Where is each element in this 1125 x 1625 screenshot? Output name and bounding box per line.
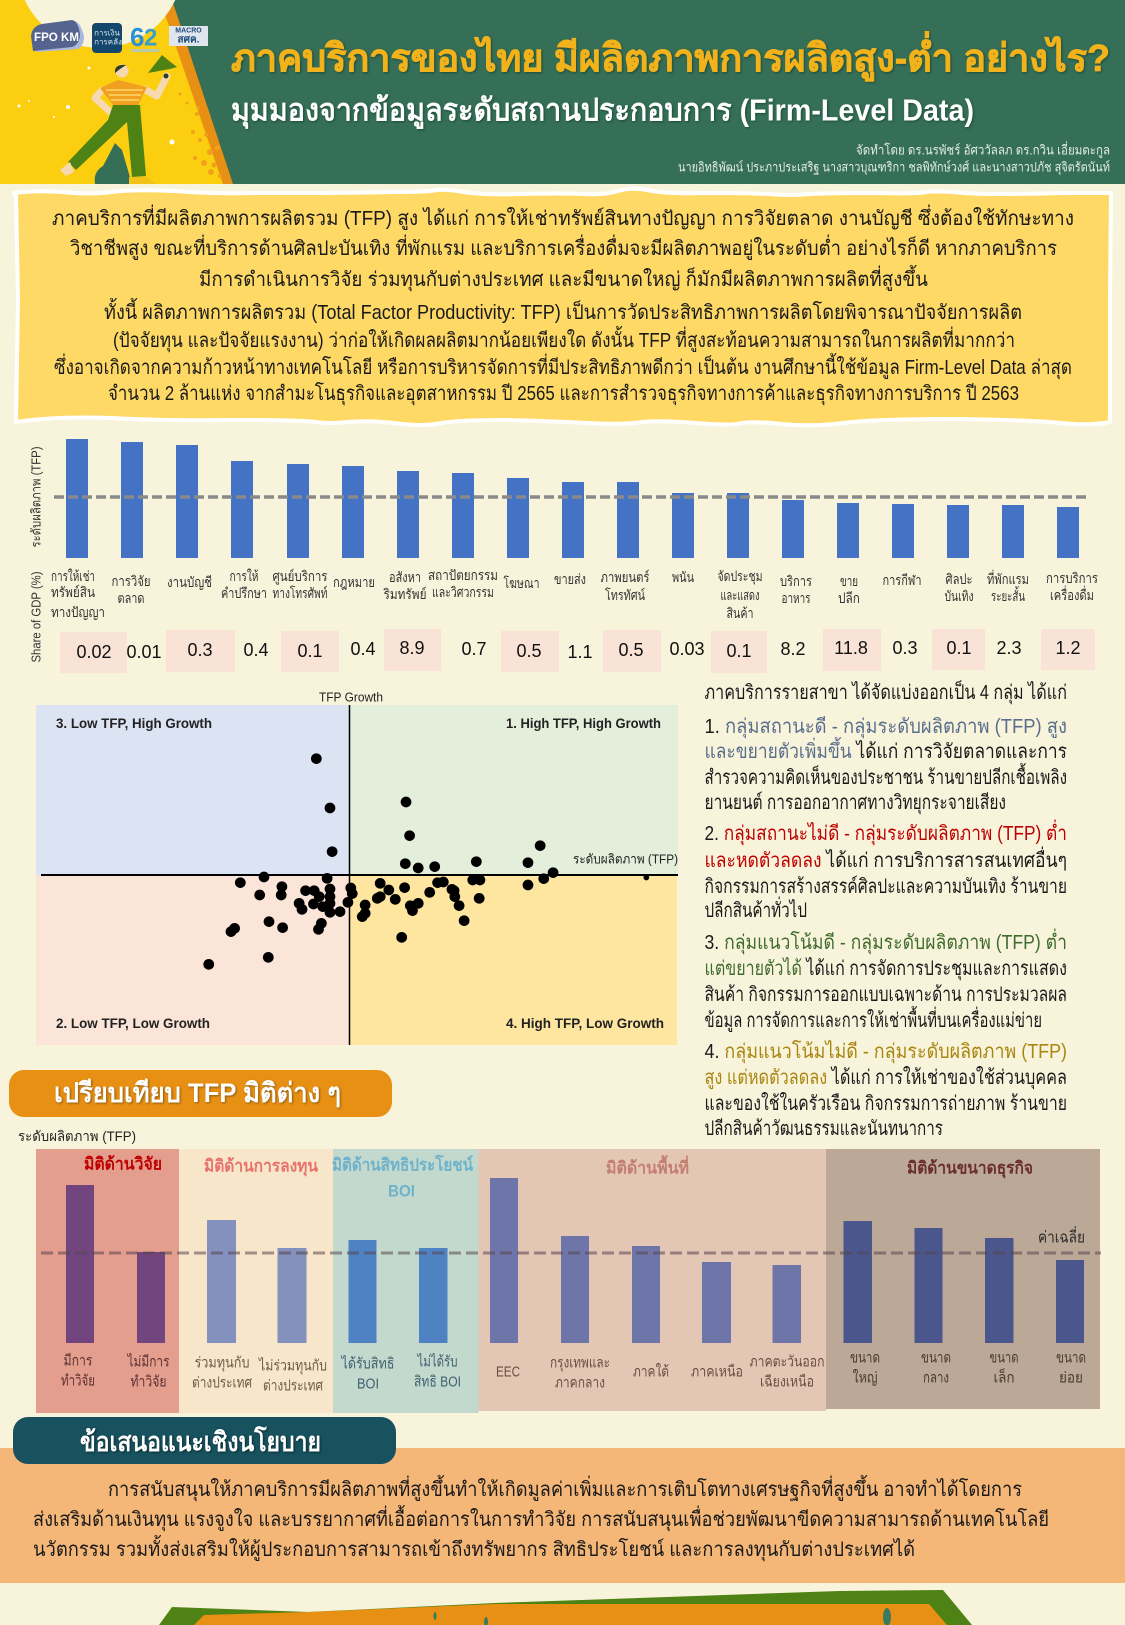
sector labels: โฆษณา [504,575,540,591]
panel: BOI: BOI [388,1182,415,1200]
group 1: และขยายตัวเพิ่มขึ้น ได้แก่ การวิจัยตลาดและการ [704,737,1067,763]
panel: research: มิติด้านวิจัย [84,1154,162,1174]
share of GDP table: 0.3 [187,640,213,660]
panel: investment: ร่วมทุนกับ [194,1354,250,1372]
panel: firm size [826,1149,1100,1409]
group 4: สูง แต่หดตัวลดลง ได้แก่ การให้เช่าของใช้ส่วนบุคคล [704,1066,1067,1090]
icon: FPO KM logo: FPO KM [34,30,79,44]
sector labels [51,567,1098,621]
share of GDP table: 0.03 [669,639,705,659]
heading: TFP comparison: เปรียบเทียบ TFP มิติต่าง ๆ [54,1078,341,1108]
heading: policy [13,1417,396,1464]
axis label: TFP: ระดับผลิตภาพ (TFP) [28,446,44,548]
text block: findings: วิชาชีพสูง ขณะที่บริการด้านศิลปะบันเทิง ที่พักแรม และบริการเครื่องดื่มจะมีผลิตภาพอยู่ในระดับต่ำ อย่างไรก็ดี หากภาคบริการ [70,234,1057,261]
sector labels: ศิลปะ [946,571,972,587]
share of GDP table: 8.2 [780,639,806,659]
group 2 [704,819,1067,922]
sector labels: ทางปัญญา [51,604,105,620]
text block: definition [54,298,1072,406]
share of GDP table: 2.3 [996,638,1022,658]
text block: findings: ภาคบริการที่มีผลิตภาพการผลิตรวม (TFP) สูง ได้แก่ การให้เช่าทรัพย์สินทางปัญญา การวิจัยตลาด งานบัญชี ซึ่งต้องใช้ทักษะทาง [52,204,1074,231]
axis label: TFP growth: TFP Growth [319,690,383,704]
panel: BOI: BOI [357,1376,379,1392]
panel: investment: มิติด้านการลงทุน [204,1156,318,1176]
sector labels: การให้ [230,568,258,584]
sector labels: และวิศวกรรม [432,584,494,600]
sector labels: ศูนย์บริการ [272,568,328,585]
group 3 [704,928,1067,1033]
panel: investment: ต่างประเทศ [192,1374,252,1392]
share of GDP table: 11.8 [834,638,868,658]
panel: area: กรุงเทพและ [550,1354,610,1372]
panel: BOI: สิทธิ BOI [414,1374,461,1390]
panel: firm size: กลาง [923,1370,949,1386]
subtitle: มุมมองจากข้อมูลระดับสถานประกอบการ (Firm-Level Data) [231,92,974,130]
axis label: share of GDP: Share of GDP (%) [28,572,44,662]
sector labels: การให้เช่า [51,568,95,584]
share of GDP table [60,629,1095,673]
icon: fiscal journal logo: การเงิน [94,28,120,38]
share of GDP table: 0.5 [516,641,542,661]
panel: firm size: ใหญ่ [852,1368,878,1386]
group 1: ยานยนต์ การออกอากาศทางวิทยุกระจายเสียง [704,791,1006,815]
group 4: 4. กลุ่มแนวโน้มไม่ดี - กลุ่มระดับผลิตภาพ (TFP) [704,1040,1067,1064]
sector labels: การบริการ [1046,570,1098,586]
quadrant labels [56,715,664,1031]
panel: research: มีการ [64,1352,92,1370]
sector labels: บริการ [780,573,812,589]
sector labels: ระยะสั้น [991,586,1025,604]
share of GDP table: 0.3 [892,638,918,658]
text block: definition: ทั้งนี้ ผลิตภาพการผลิตรวม (Total Factor Productivity: TFP) เป็นการวัดประสิทธิภาพการผลิตโดยพิจารณาปัจจัยการผลิต [104,298,1022,324]
group 3: แต่ขยายตัวได้ ได้แก่ การจัดการประชุมและการแสดง [704,957,1067,981]
share of GDP table: 0.1 [726,641,752,661]
group 2: ปลีกสินค้าทั่วไป [704,896,807,922]
axis label: TFP level: ระดับผลิตภาพ (TFP) [573,852,678,866]
sector labels: สถาปัตยกรรม [428,567,498,583]
panel: firm size: มิติด้านขนาดธุรกิจ [907,1158,1033,1178]
sector labels: ทางโทรศัพท์ [272,585,328,601]
text block: policy: การสนับสนุนให้ภาคบริการมีผลิตภาพที่สูงขึ้นทำให้เกิดมูลค่าเพิ่มและการเติบโตทางเศรษฐกิจที่สูงขึ้น อาจทำได้โดยการ [108,1475,1022,1502]
sector labels: ทรัพย์สิน [51,584,95,600]
share of GDP table: 0.1 [946,638,972,658]
group 2: 2. กลุ่มสถานะไม่ดี - กลุ่มระดับผลิตภาพ (TFP) ต่ำ [704,819,1067,846]
panel: area: EEC [496,1364,520,1380]
share of GDP table: 1.2 [1055,638,1081,658]
sector labels: การกีฬา [882,572,922,588]
panel: area: มิติด้านพื้นที่ [606,1154,689,1178]
panel: investment: ต่างประเทศ [263,1378,323,1394]
group 4: ปลีกสินค้าวัฒนธรรมและนันทนาการ [704,1118,943,1140]
panel: comparison chart [36,1149,1101,1413]
text block: findings [52,204,1074,292]
panel: area [478,1149,826,1411]
group 3: 3. กลุ่มแนวโน้มดี - กลุ่มระดับผลิตภาพ (TFP) ต่ำ [704,928,1067,955]
quadrant labels: 3. Low TFP, High Growth [56,715,212,731]
group 1 [704,716,1067,815]
title: ภาคบริการของไทย มีผลิตภาพการผลิตสูง-ต่ำ อย่างไร? [231,31,1110,82]
scatter points [203,753,649,970]
sector labels: ตลาด [118,590,144,606]
icon: FPO KM logo [31,20,84,52]
icon: macro logo: สศค. [178,34,200,46]
panel: firm size: ย่อย [1059,1370,1083,1386]
quadrant labels: 2. Low TFP, Low Growth [56,1015,210,1031]
panel: investment: ไม่ร่วมทุนกับ [258,1356,327,1376]
sector labels: เครื่องดื่ม [1050,586,1094,603]
share of GDP table: 0.4 [350,639,376,659]
heading: TFP comparison [9,1070,392,1117]
authors [678,142,1110,176]
icon: 62 years logo [130,22,159,52]
quadrant scatter chart [36,690,678,1045]
sector labels: สินค้า [726,605,754,621]
sector labels: ที่พักแรม [987,570,1029,587]
sector labels: และแสดง [720,587,760,603]
panel: BOI [332,1149,478,1413]
panel: area: เฉียงเหนือ [760,1374,814,1390]
axis label: comparison TFP: ระดับผลิตภาพ (TFP) [18,1128,136,1144]
panel: firm size: ขนาด [990,1350,1018,1366]
panel: research [36,1149,179,1413]
share of GDP table: 0.01 [126,642,162,662]
icon: fiscal journal logo: การคลัง [94,38,122,46]
text block: findings: มีการดำเนินการวิจัย ร่วมทุนกับต่างประเทศ และมีขนาดใหญ่ ก็มักมีผลิตภาพการผลิตที่สูงขึ้น [199,265,928,292]
icon: 62 years logo: 2 [144,24,157,52]
sector labels: พนัน [672,569,694,585]
sector labels: การวิจัย [112,573,150,589]
group 4 [704,1040,1067,1140]
sector labels: อสังหา [389,569,421,585]
footer decoration [159,1590,972,1625]
icon: fiscal journal logo [92,23,122,53]
bar chart: TFP by sector [28,439,1089,558]
sector labels: อาหาร [782,590,811,606]
panel: area: ภาคตะวันออก [750,1354,824,1370]
heading: policy: ข้อเสนอแนะเชิงนโยบาย [80,1425,321,1457]
panel: area: ภาคใต้ [633,1362,669,1380]
sector labels: บันเทิง [944,588,974,604]
panel: firm size: ขนาด [1056,1350,1086,1366]
panel: BOI: ไม่ได้รับ [417,1352,458,1370]
panel: research: ทำวิจัย [130,1374,166,1390]
panel: area: ภาคกลาง [555,1374,605,1392]
share of GDP table: 0.4 [243,640,269,660]
panel: firm size: เล็ก [994,1368,1014,1386]
sector labels: ปลีก [838,590,860,606]
share of GDP table: 0.02 [76,642,112,662]
panel: firm size: ขนาด [921,1350,951,1366]
panel: research: ทำวิจัย [61,1372,95,1390]
panel: summary box [14,189,1111,425]
share of GDP table: 0.7 [461,639,487,659]
share of GDP table: 0.5 [618,640,644,660]
panel: policy recommendation [0,1448,1125,1583]
sector labels: ขายส่ง [554,571,586,587]
icon: macro logo [169,26,208,46]
panel: BOI: ได้รับสิทธิ [341,1354,394,1372]
quadrant labels: 1. High TFP, High Growth [506,715,661,731]
panel: area: ภาคเหนือ [691,1364,743,1380]
panel: firm size: ขนาด [850,1350,880,1366]
share of GDP table: 1.1 [567,642,593,662]
icon: 62 years logo: 6 [130,22,144,52]
bars [66,439,1079,558]
sector labels: ภาพยนตร์ [600,569,650,585]
sector labels: กฎหมาย [333,574,375,590]
icon: person with megaphone [60,55,177,184]
text block: policy [33,1475,1049,1562]
sector labels: จัดประชุม [718,568,762,585]
sector labels: คำปรึกษา [221,585,267,601]
text block: policy: นวัตกรรม รวมทั้งส่งเสริมให้ผู้ประกอบการสามารถเข้าถึงทรัพยากร สิทธิประโยชน์ และการลงทุนกับต่างประเทศได้ [33,1535,915,1562]
share of GDP table: 8.9 [399,638,425,658]
panel: investment [179,1149,333,1413]
panel: firm size: ค่าเฉลี่ย [1038,1226,1085,1246]
sector labels: งานบัญชี [167,574,212,590]
sector labels: ริมทรัพย์ [383,586,426,602]
group 2: และหดตัวลดลง ได้แก่ การบริการสารสนเทศอื่นๆ [704,846,1067,872]
panel: research: ไม่มีการ [127,1352,170,1370]
text block: four groups [704,679,1067,1140]
icon: macro logo: MACRO [175,28,202,34]
sector labels: ขาย [840,573,858,589]
sector labels: โทรทัศน์ [605,587,645,603]
panel: header banner [0,0,1125,184]
share of GDP table: 0.1 [297,641,323,661]
text block: policy: ส่งเสริมด้านเงินทุน แรงจูงใจ และบรรยากาศที่เอื้อต่อการในการทำวิจัย การสนับสนุนเพื่อช่วยพัฒนาขีดความสามารถด้านเทคโนโลยี [33,1505,1049,1532]
group 1: 1. กลุ่มสถานะดี - กลุ่มระดับผลิตภาพ (TFP) สูง [704,716,1067,739]
quadrant labels: 4. High TFP, Low Growth [506,1015,664,1031]
panel: BOI: มิติด้านสิทธิประโยชน์ [332,1154,473,1174]
